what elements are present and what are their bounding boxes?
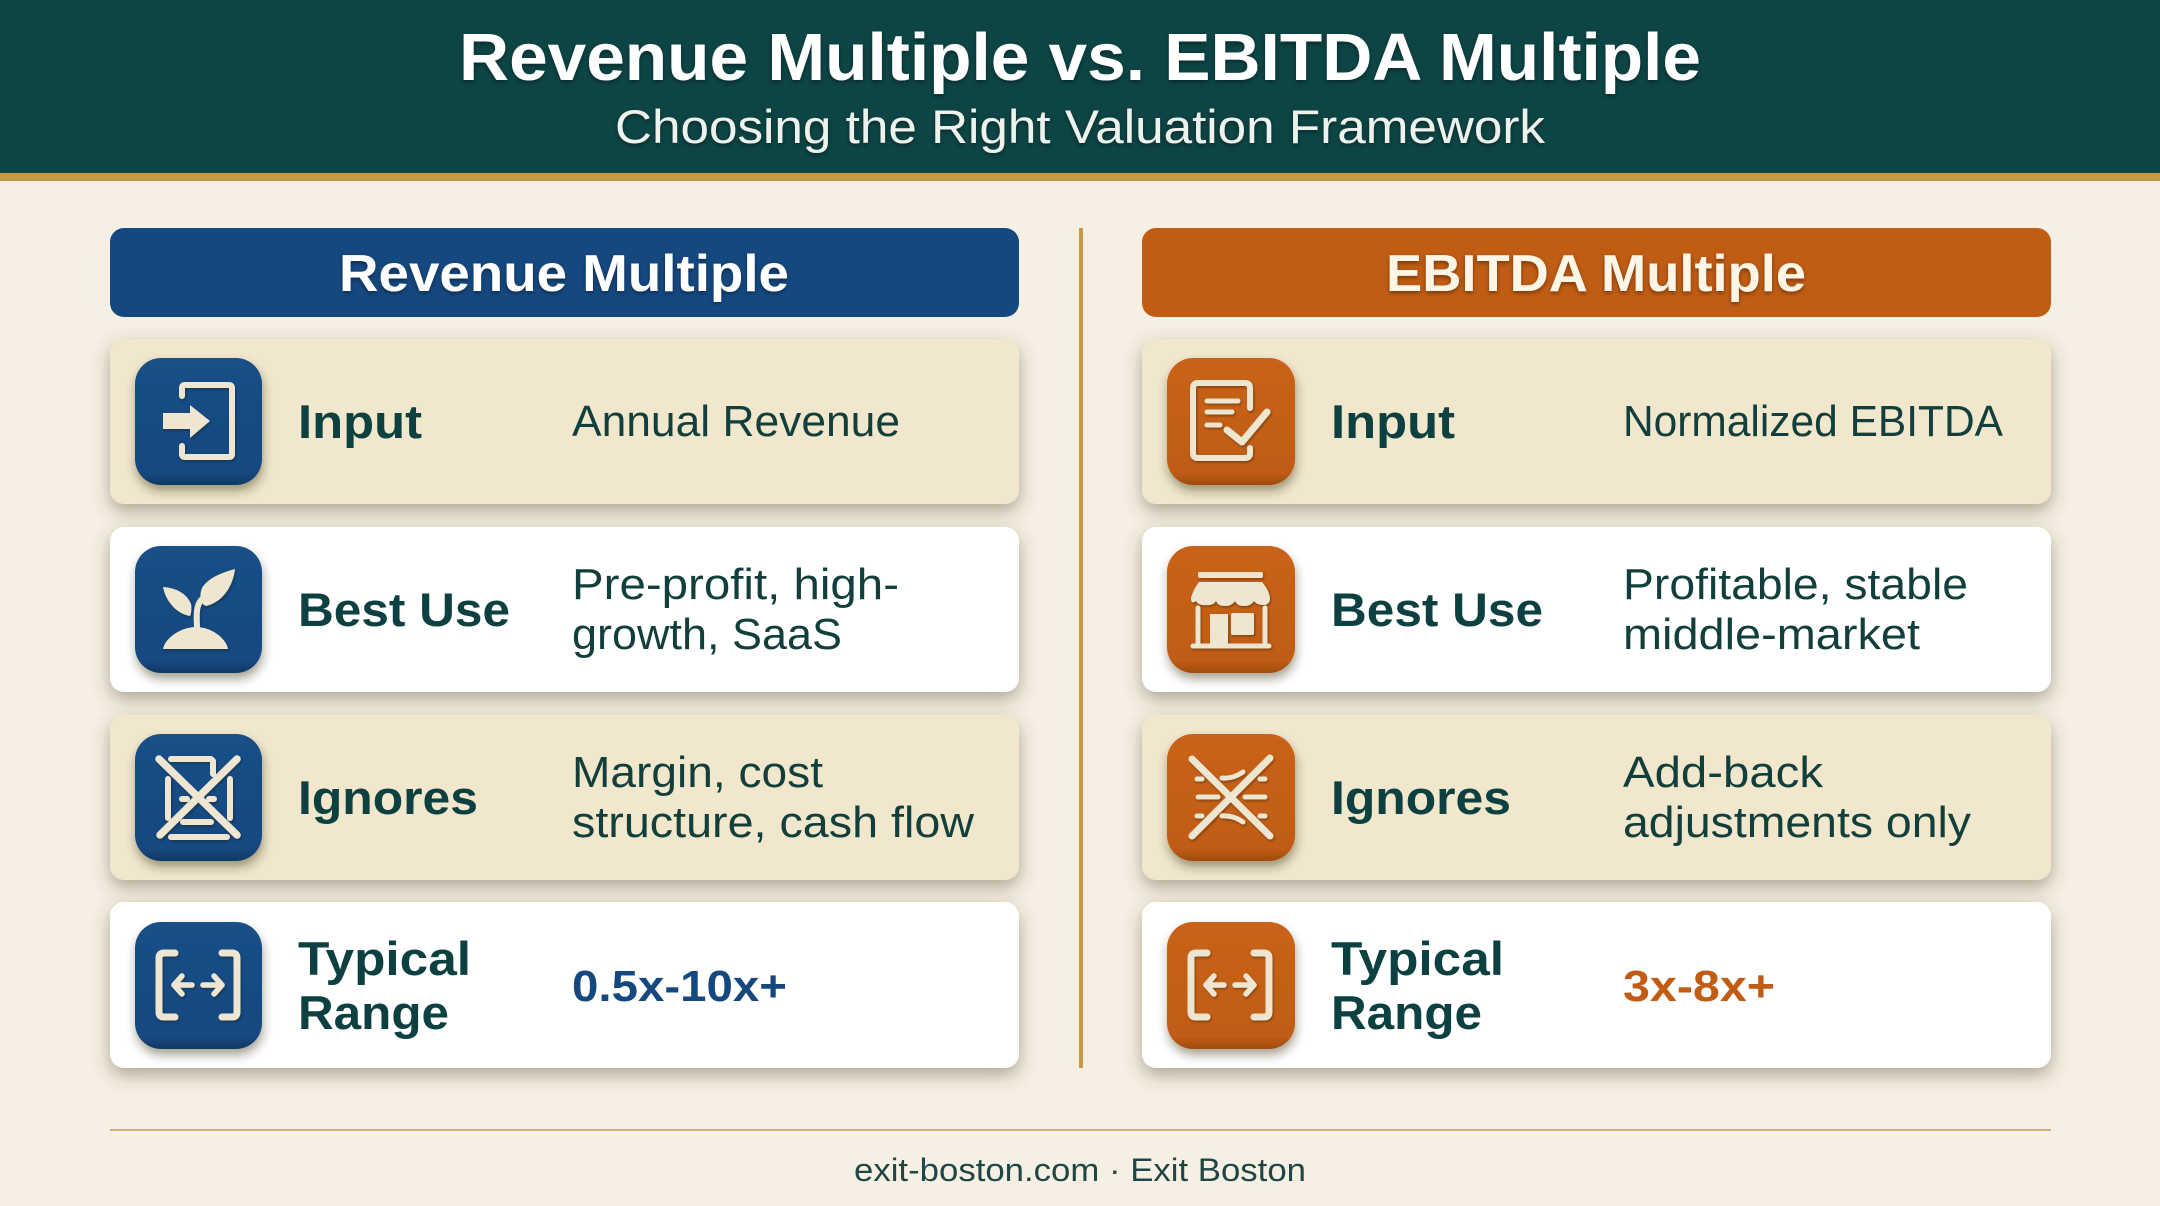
row: ignores <box>1142 715 2051 880</box>
row: input: Input <box>298 395 422 448</box>
icon: range brackets <box>135 922 262 1049</box>
row: best use: Profitable, stable <box>1623 560 1968 609</box>
row: typical range <box>1142 902 2051 1068</box>
column divider <box>1079 228 1083 1068</box>
subtitle: Choosing the Right Valuation Framework <box>615 100 1546 153</box>
row: ignores: Margin, cost <box>572 748 823 797</box>
row: best use: Best Use <box>1331 583 1543 636</box>
row: input: Normalized EBITDA <box>1623 397 2004 446</box>
row: ignores: adjustments only <box>1623 798 1971 847</box>
column header: revenue multiple <box>110 228 1019 317</box>
row: ignores <box>110 715 1019 880</box>
row: best use: Pre-profit, high- <box>572 560 899 609</box>
row: typical range: 3x-8x+ <box>1623 962 1775 1011</box>
row: best use: middle-market <box>1623 610 1920 659</box>
title banner <box>0 0 2160 181</box>
icon: enter arrow <box>135 358 262 485</box>
column header: ebitda multiple <box>1142 228 2051 317</box>
icon: range brackets <box>1167 922 1295 1049</box>
icon: document check <box>1167 358 1295 485</box>
row: input <box>110 339 1019 504</box>
row: typical range: Typical <box>1331 932 1504 985</box>
title: Revenue Multiple vs. EBITDA Multiple <box>459 20 1701 95</box>
row: ignores: Ignores <box>298 771 478 824</box>
row: typical range: 0.5x-10x+ <box>572 962 787 1011</box>
row: typical range: Range <box>298 986 449 1039</box>
column header: ebitda multiple: EBITDA Multiple <box>1386 245 1806 303</box>
panel: revenue multiple <box>110 228 1019 1068</box>
icon: sprout <box>135 546 262 673</box>
row: ignores: Ignores <box>1331 771 1511 824</box>
icon: crossed out lines <box>1167 734 1295 861</box>
row: typical range: Typical <box>298 932 471 985</box>
row: ignores: Add-back <box>1623 748 1824 797</box>
row: best use <box>110 527 1019 692</box>
row: input <box>1142 339 2051 504</box>
column header: revenue multiple: Revenue Multiple <box>339 245 789 303</box>
row: input: Input <box>1331 395 1455 448</box>
row: typical range: Range <box>1331 986 1482 1039</box>
row: best use: growth, SaaS <box>572 610 842 659</box>
row: input: Annual Revenue <box>572 397 900 446</box>
icon: storefront <box>1167 546 1295 673</box>
row: best use <box>1142 527 2051 692</box>
icon: crossed out box <box>135 734 262 861</box>
footer: exit-boston.com · Exit Boston <box>854 1152 1306 1188</box>
row: ignores: structure, cash flow <box>572 798 974 847</box>
row: best use: Best Use <box>298 583 510 636</box>
row: typical range <box>110 902 1019 1068</box>
panel: ebitda multiple <box>1142 228 2051 1068</box>
